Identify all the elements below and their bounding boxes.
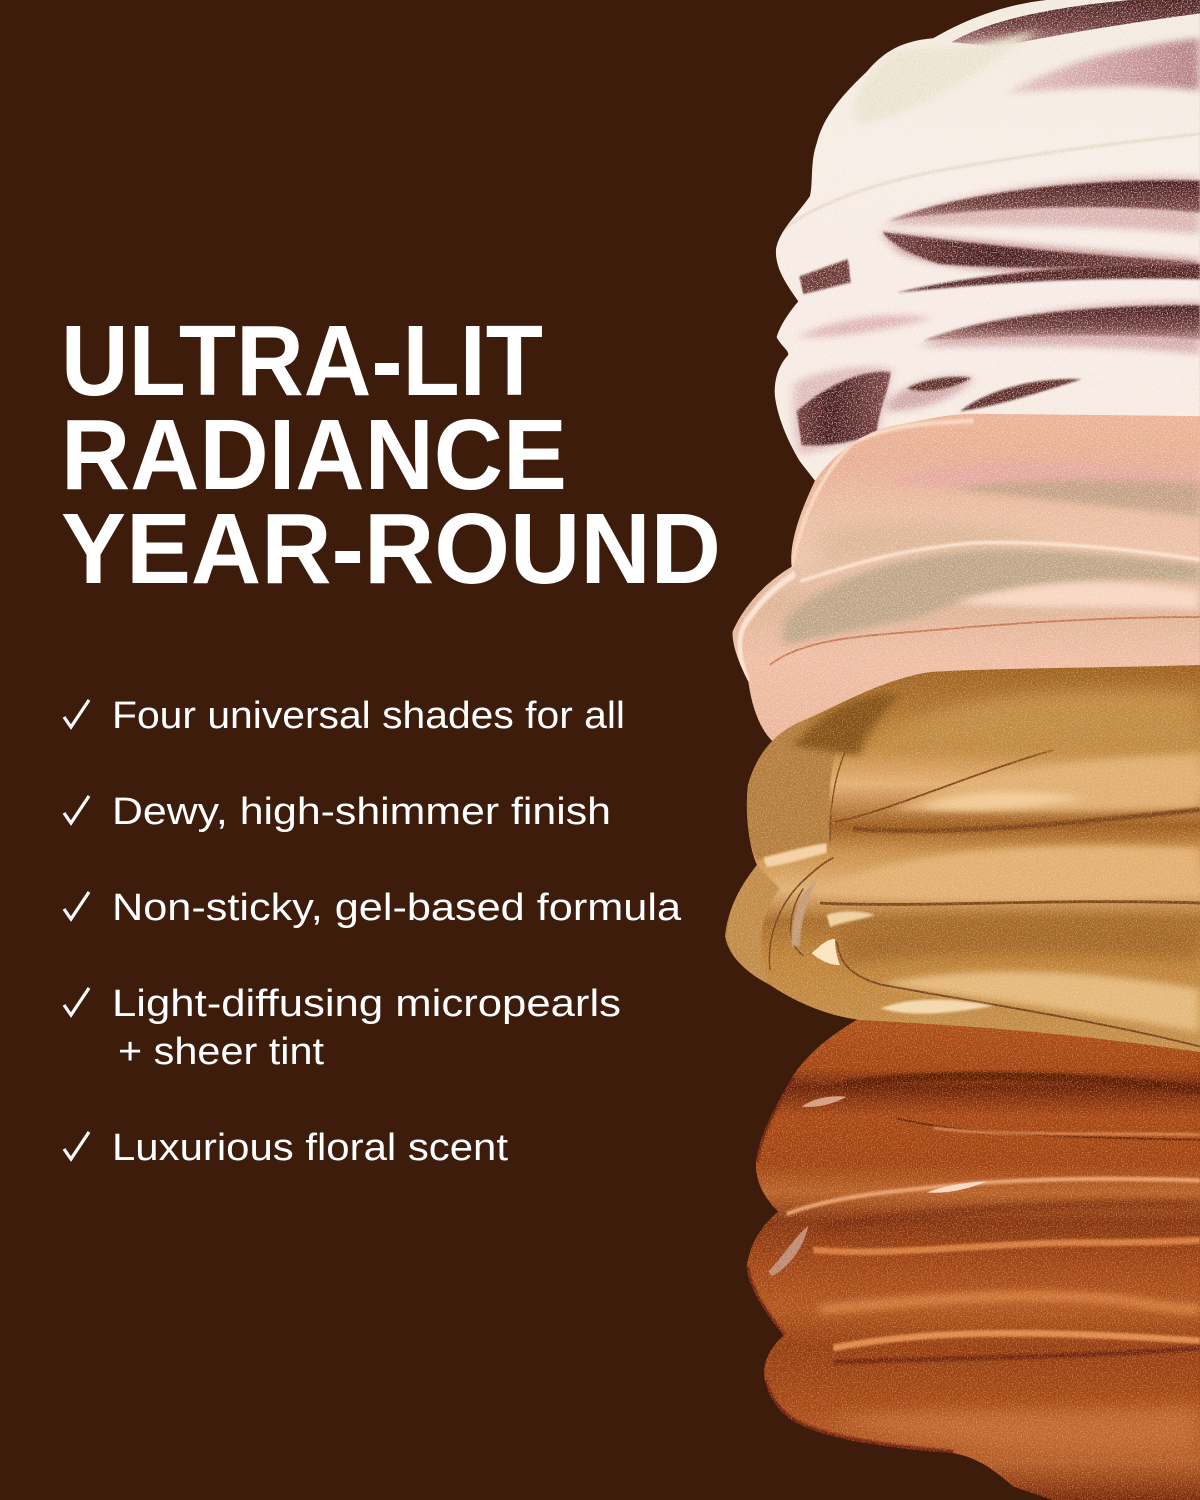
notch left: [799, 259, 851, 294]
translucent curl: [791, 879, 817, 946]
fold swirl: [769, 858, 1200, 1047]
swoop crease: [830, 736, 1053, 841]
ridge three: [820, 1296, 1200, 1310]
lower pocket: [797, 372, 891, 445]
mauve streak two: [883, 232, 1200, 267]
item: scent: Luxurious floral scent: [112, 1127, 508, 1169]
mauve streak one: [888, 180, 1200, 221]
glossy flash: [927, 1181, 987, 1193]
dark crease upper: [843, 1076, 1200, 1090]
heading: ULTRA-LIT: [61, 305, 543, 417]
lower pocket halo: [793, 367, 892, 454]
bottom flash: [880, 1000, 993, 1014]
dark crease two: [820, 1204, 1200, 1228]
translucent smear: [768, 1226, 808, 1276]
curl flash: [812, 939, 840, 965]
thin dark strand: [897, 264, 1200, 293]
shaded band: [840, 918, 1200, 965]
cream shoulder: [854, 29, 1040, 124]
bright band low: [880, 972, 1200, 1032]
lower glow: [827, 1405, 1200, 1453]
curl flash upper: [827, 911, 875, 927]
small streak right: [960, 379, 1082, 411]
item: micropearls: Light-diffusing micropearls: [112, 983, 621, 1025]
bright band mid: [817, 846, 1200, 901]
swatch: rose peach: [720, 410, 1200, 755]
left rim lobe: [726, 865, 780, 982]
dark rim: [747, 1075, 953, 1453]
thin highlight: [933, 1128, 1200, 1135]
small streak halo: [887, 376, 973, 411]
pale rim lower: [740, 574, 795, 682]
item: finish: Dewy, high-shimmer finish: [112, 791, 611, 833]
fold line: [783, 134, 1200, 230]
dark crease mid: [820, 902, 1200, 904]
dark crease top: [853, 810, 1200, 831]
benefits list: [64, 695, 682, 1169]
item: formula: Non-sticky, gel-based formula: [112, 887, 682, 929]
lobe flash: [763, 843, 827, 867]
copper crease: [770, 617, 1200, 665]
heading: RADIANCE: [61, 399, 567, 511]
swatch: copper bronze: [740, 1010, 1200, 1500]
shining dome: [870, 691, 1200, 750]
product swatches: [725, 0, 1200, 1500]
pale rim: [792, 421, 973, 567]
pale mauve band: [797, 315, 933, 337]
translucent flash top: [802, 1096, 847, 1107]
dark crease three: [833, 1348, 1200, 1362]
mauve streak three: [923, 305, 1200, 341]
halo two: [880, 232, 1200, 275]
heading: [61, 305, 721, 605]
heading: YEAR-ROUND: [61, 493, 721, 605]
left lobe: [740, 721, 843, 860]
bright ridge: [787, 1179, 1200, 1214]
ridge two: [813, 1240, 1200, 1252]
grey gold band: [783, 550, 1200, 646]
thin crease: [897, 1118, 1200, 1140]
item: micropearls: [64, 983, 621, 1073]
swatch: golden bronze: [720, 660, 1200, 1055]
pink sheen: [887, 462, 1200, 502]
champagne centre: [820, 520, 1053, 569]
pale core: [920, 792, 1087, 810]
small streak dark: [907, 377, 972, 391]
ridge four: [833, 1333, 1200, 1348]
item: four shades: Four universal shades for all: [112, 695, 625, 737]
highlight ridge: [800, 542, 1200, 581]
halo one: [883, 176, 1200, 234]
dark patch top: [793, 693, 900, 756]
top dark gap with pink shimmer: [952, 0, 1200, 47]
halo three: [920, 301, 1200, 354]
item: micropearls: + sheer tint: [118, 1031, 324, 1073]
lower highlight band: [953, 582, 1200, 610]
upper pink streak: [1007, 38, 1200, 93]
swatch: pearl white: [760, 0, 1200, 490]
bright centre top: [893, 752, 1200, 811]
champagne band right: [953, 480, 1200, 517]
